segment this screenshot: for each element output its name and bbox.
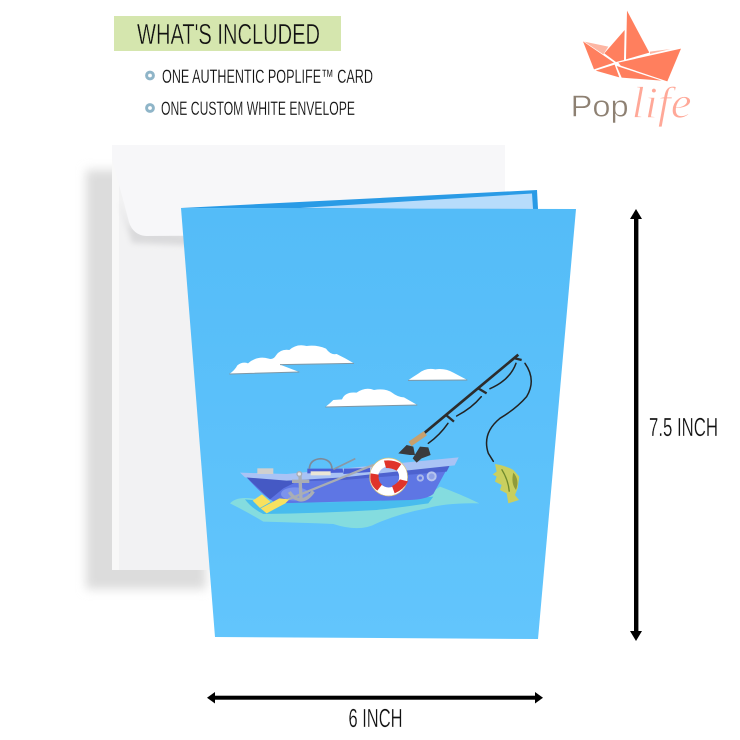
- anchor: [289, 472, 313, 500]
- list: included items: ONE CUSTOM WHITE ENVELOPE: [161, 98, 355, 120]
- boat hull: [247, 463, 450, 503]
- clouds: [229, 345, 467, 407]
- fish: [493, 464, 519, 503]
- envelope: [86, 145, 505, 589]
- pop-up card: [181, 190, 576, 639]
- heading: what's included: WHAT'S INCLUDED: [137, 19, 320, 51]
- logo: poplife paper boat: [571, 11, 692, 127]
- heading: what's included: [114, 16, 341, 51]
- illustration: clouds, boat and fishing rod: [229, 345, 531, 528]
- card front: [181, 208, 576, 639]
- portholes: [418, 475, 423, 481]
- oar: [288, 465, 374, 499]
- boat deck rim: [240, 457, 459, 481]
- fishing line: [428, 363, 531, 461]
- arrow: width dimension: [207, 692, 543, 704]
- list: included items: [147, 66, 373, 120]
- logo: poplife paper boat: Pop: [571, 90, 629, 124]
- shallow water shade: [245, 497, 433, 514]
- envelope flap: [112, 145, 505, 236]
- fishing rod: [424, 355, 518, 433]
- life ring: [370, 458, 408, 496]
- water: [230, 487, 479, 528]
- seat and handle: [257, 468, 273, 474]
- card back page: [181, 190, 538, 209]
- label: 6 inch: 6 INCH: [348, 705, 402, 733]
- arrow: height dimension: [630, 209, 642, 641]
- logo: poplife paper boat: life: [632, 78, 692, 127]
- list: included items: ONE AUTHENTIC POPLIFE™ CARD: [162, 66, 373, 88]
